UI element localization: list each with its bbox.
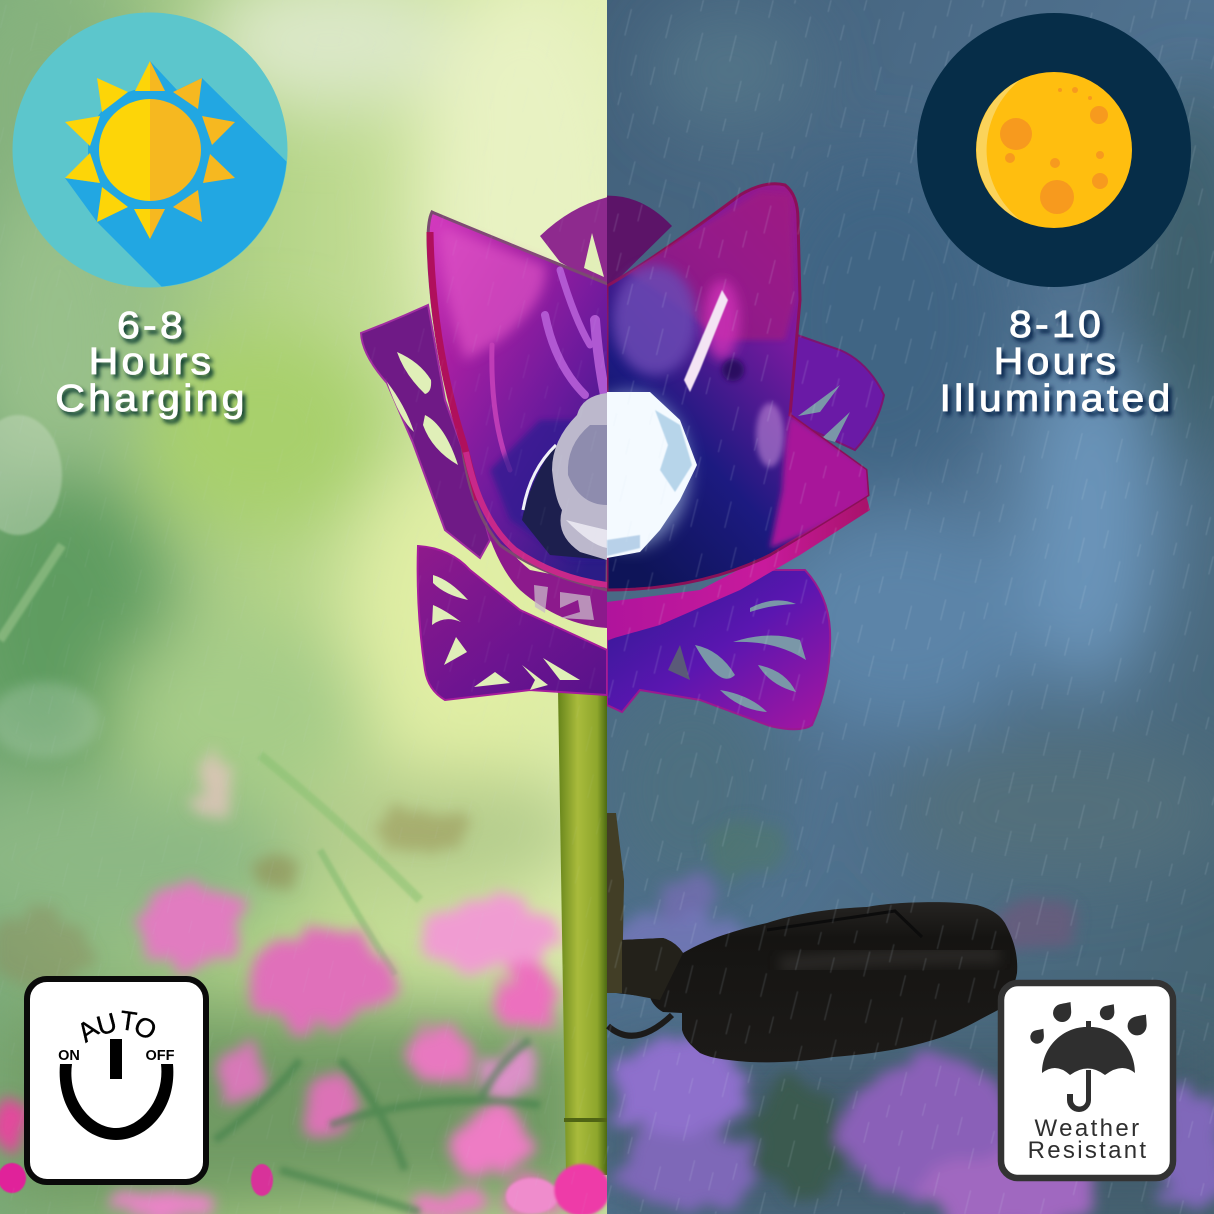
background: rainy night garden (600, 0, 1214, 1214)
left petals behind the cup (361, 196, 612, 700)
badge: auto on off (27, 979, 206, 1182)
icon: umbrella with raindrops (1030, 1002, 1147, 1112)
solar panel with bracket (607, 813, 1017, 1062)
LED crystal (522, 392, 697, 560)
product: flower stake (361, 184, 1017, 1214)
badge: weather resistant (1001, 983, 1173, 1178)
background: daytime garden (0, 0, 640, 1214)
badge: weather resistant: Weather (1034, 1115, 1142, 1142)
text: 8-10 hours illuminated: Hours (994, 340, 1119, 383)
text: 8-10 hours illuminated: Illuminated (939, 377, 1174, 420)
badge: auto on off: O (129, 1010, 162, 1046)
right petals behind the cup (600, 196, 884, 729)
icon: sun in circle (12, 12, 300, 300)
text: 6-8 hours charging: Charging (55, 377, 248, 420)
text: 6-8 hours charging: 6-8 (117, 304, 186, 347)
text: 8-10 hours illuminated: 8-10 (1009, 303, 1104, 346)
dark hollow behind crystal (522, 445, 607, 560)
icon: power symbol (60, 1039, 173, 1140)
badge: auto on off: U (93, 1007, 120, 1041)
pink flower over stem base (506, 1164, 610, 1214)
stem (558, 690, 607, 1175)
text: 6-8 hours charging (55, 304, 248, 420)
badge: weather resistant: Resistant (1028, 1137, 1148, 1164)
badge: auto on off: A (72, 1013, 104, 1048)
badge: auto on off: OFF (146, 1048, 175, 1064)
text: 6-8 hours charging: Hours (89, 340, 214, 383)
left half of glass cup (428, 212, 610, 628)
right half of glass cup (607, 184, 870, 640)
badge: auto on off: ON (58, 1048, 80, 1064)
background: pink flowers (0, 758, 560, 1214)
icon: moon in circle (917, 13, 1191, 287)
badge: auto on off: T (118, 1005, 139, 1037)
text: 8-10 hours illuminated (939, 303, 1174, 420)
